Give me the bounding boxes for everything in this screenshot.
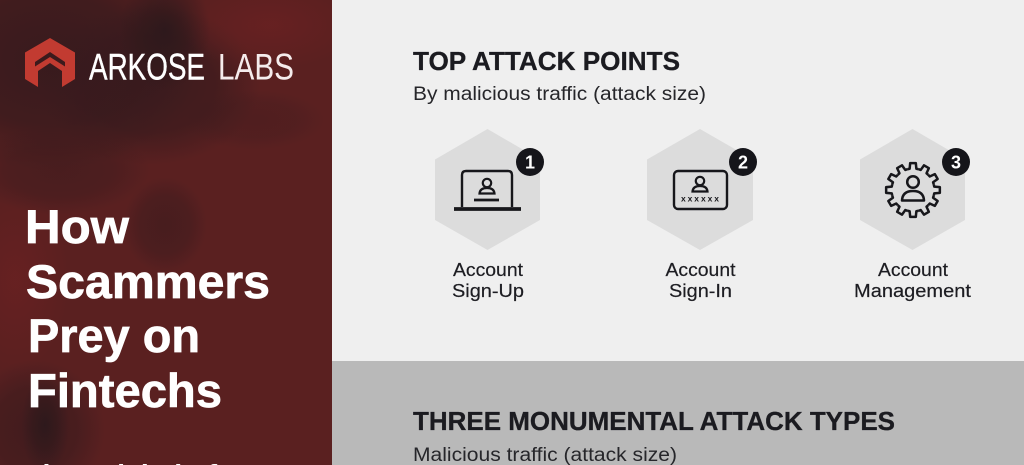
title: Scammers (26, 255, 270, 308)
panel: top attack points (332, 0, 1024, 361)
attack point 3: account management (854, 129, 971, 301)
label: account management: Management (854, 280, 971, 301)
icon: hexagon background (647, 129, 753, 250)
label: account sign-in: Account (666, 259, 736, 280)
panel: three monumental attack types (332, 361, 1024, 465)
badge: number 3 (942, 148, 970, 176)
label: account sign-up: Account (453, 259, 523, 280)
title (25, 200, 270, 417)
logo wordmark: Labs: LABS (218, 46, 294, 88)
label: account sign-in: Sign-In (669, 280, 732, 301)
title: How (25, 200, 129, 253)
logo: Arkose Labs (25, 38, 294, 88)
label: account sign-up: Sign-Up (452, 280, 524, 301)
heading: top attack points: TOP ATTACK POINTS (413, 48, 680, 76)
attack point 1: account sign-up (435, 129, 544, 301)
attack point 2: account sign-in (647, 129, 757, 301)
label: account sign-up (452, 259, 524, 301)
badge: number 1: 1 (525, 152, 535, 172)
icon: login card with user: xxxxxx (681, 194, 719, 204)
icon: gear with user (886, 163, 940, 217)
label: account management: Account (878, 259, 948, 280)
title: Prey on (28, 309, 200, 362)
icon: hexagon background (435, 129, 540, 250)
icon: login card with user (674, 171, 727, 209)
label: account management (854, 259, 971, 301)
label: account sign-in (666, 259, 736, 301)
logo wordmark: Arkose: ARKOSE (89, 46, 205, 88)
subheading: by malicious traffic: By malicious traffic (attack size) (413, 84, 706, 105)
heading: three monumental attack types: THREE MONUMENTAL ATTACK TYPES (413, 408, 895, 436)
icon: logo mark (25, 38, 75, 87)
icon: laptop with user (454, 171, 521, 209)
badge: number 2 (729, 148, 757, 176)
badge: number 1 (516, 148, 544, 176)
badge: number 2: 2 (738, 152, 748, 172)
panel: left brand panel (0, 0, 360, 465)
title: Fintechs (28, 364, 222, 417)
badge: number 3: 3 (951, 152, 961, 172)
icon: hexagon background (860, 129, 965, 250)
